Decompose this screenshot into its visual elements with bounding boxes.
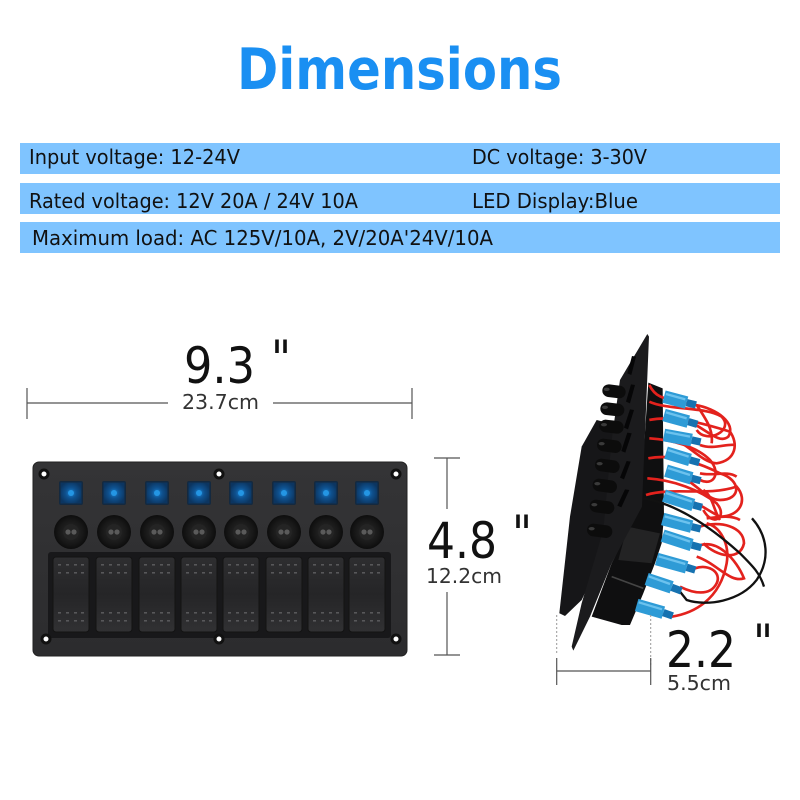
depth dimension: 2.2 inches: 5.5cm <box>667 671 731 695</box>
side view of wired panel <box>559 334 766 651</box>
rockers seen from the side <box>559 420 637 616</box>
height dimension: 4.8 inches <box>426 458 532 655</box>
depth dimension: 2.2 inches: 2.2 <box>666 621 736 679</box>
round push buttons from side <box>593 391 619 532</box>
spec row: rated voltage and LED display: Rated voltage: 12V 20A / 24V 10A <box>29 189 358 213</box>
wires: red loops <box>646 385 744 617</box>
title: Dimensions <box>237 37 562 103</box>
switch bodies behind plate <box>592 383 664 625</box>
spec row: maximum load: Maximum load: AC 125V/10A, 2V/20A'24V/10A <box>32 226 493 250</box>
spec row: rated voltage and LED display: LED Display:Blue <box>472 189 638 213</box>
plate slots <box>617 356 636 507</box>
spec row: input and DC voltage <box>20 143 780 174</box>
width dimension: 9.3 inches: 23.7cm <box>182 390 259 414</box>
spec table <box>20 143 780 253</box>
spec row: input and DC voltage: DC voltage: 3-30V <box>472 145 647 169</box>
height dimension: 4.8 inches: " <box>512 505 532 563</box>
spec row: maximum load <box>20 222 780 253</box>
switch columns <box>53 481 385 632</box>
button highlights <box>589 388 610 530</box>
width dimension: 9.3 inches <box>27 330 412 419</box>
mounting plate <box>572 334 649 651</box>
front view of switch panel <box>33 462 407 656</box>
width dimension: 9.3 inches: " <box>271 330 291 388</box>
mounting holes <box>40 470 400 643</box>
width dimension: 9.3 inches: 9.3 <box>184 337 255 395</box>
height dimension: 4.8 inches: 12.2cm <box>426 564 502 588</box>
height dimension: 4.8 inches: 4.8 <box>427 512 497 570</box>
depth dimension: 2.2 inches <box>557 614 773 695</box>
wires: black <box>643 498 766 603</box>
depth dimension: 2.2 inches: " <box>753 614 773 672</box>
spec row: rated voltage and LED display <box>20 183 780 214</box>
blue spade connectors <box>637 394 702 616</box>
spec row: input and DC voltage: Input voltage: 12-24V <box>29 145 240 169</box>
